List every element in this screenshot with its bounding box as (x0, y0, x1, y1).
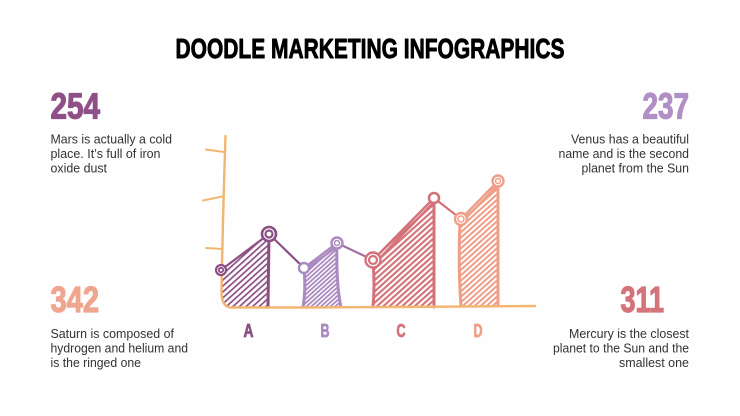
stat block: 342 Saturn (50, 279, 188, 370)
doodle chart (203, 136, 535, 308)
stat block: 254 Mars (50, 86, 172, 176)
stat block: 311 Mercury: smallest one (619, 356, 689, 370)
axis labels: B (320, 321, 330, 341)
axes (203, 136, 535, 308)
stat block: 342 Saturn: hydrogen and helium and (50, 342, 188, 356)
stat block: 342 Saturn: 342 (50, 279, 99, 320)
stat block: 254 Mars: oxide dust (50, 162, 108, 176)
stat block: 237 Venus (558, 86, 689, 176)
stat block: 254 Mars: Mars is actually a cold (50, 132, 172, 146)
stat block: 342 Saturn: Saturn is composed of (50, 327, 175, 341)
axis labels: C (396, 321, 406, 341)
stat block: 311 Mercury (553, 279, 690, 370)
data points (216, 176, 504, 275)
stat block: 237 Venus: 237 (642, 86, 689, 126)
area C (373, 198, 434, 307)
stat block: 237 Venus: name and is the second (558, 147, 689, 161)
stat block: 237 Venus: Venus has a beautiful (571, 132, 689, 146)
stat block: 311 Mercury: Mercury is the closest (569, 327, 690, 341)
stat block: 254 Mars: 254 (50, 86, 100, 126)
stat block: 254 Mars: place. It’s full of iron (50, 147, 161, 161)
stat block: 342 Saturn: is the ringed one (50, 356, 141, 370)
stat block: 311 Mercury: planet to the Sun and the (553, 342, 689, 356)
stat block: 237 Venus: planet from the Sun (582, 162, 689, 176)
area A (221, 234, 269, 307)
axis labels (244, 321, 482, 341)
axis labels: A (244, 321, 254, 341)
title: DOODLE MARKETING INFOGRAPHICS (176, 33, 564, 64)
axis labels: D (474, 321, 482, 341)
area D (459, 181, 498, 306)
connecting lines (269, 198, 461, 268)
stat block: 311 Mercury: 311 (620, 279, 664, 320)
area B (303, 243, 341, 307)
